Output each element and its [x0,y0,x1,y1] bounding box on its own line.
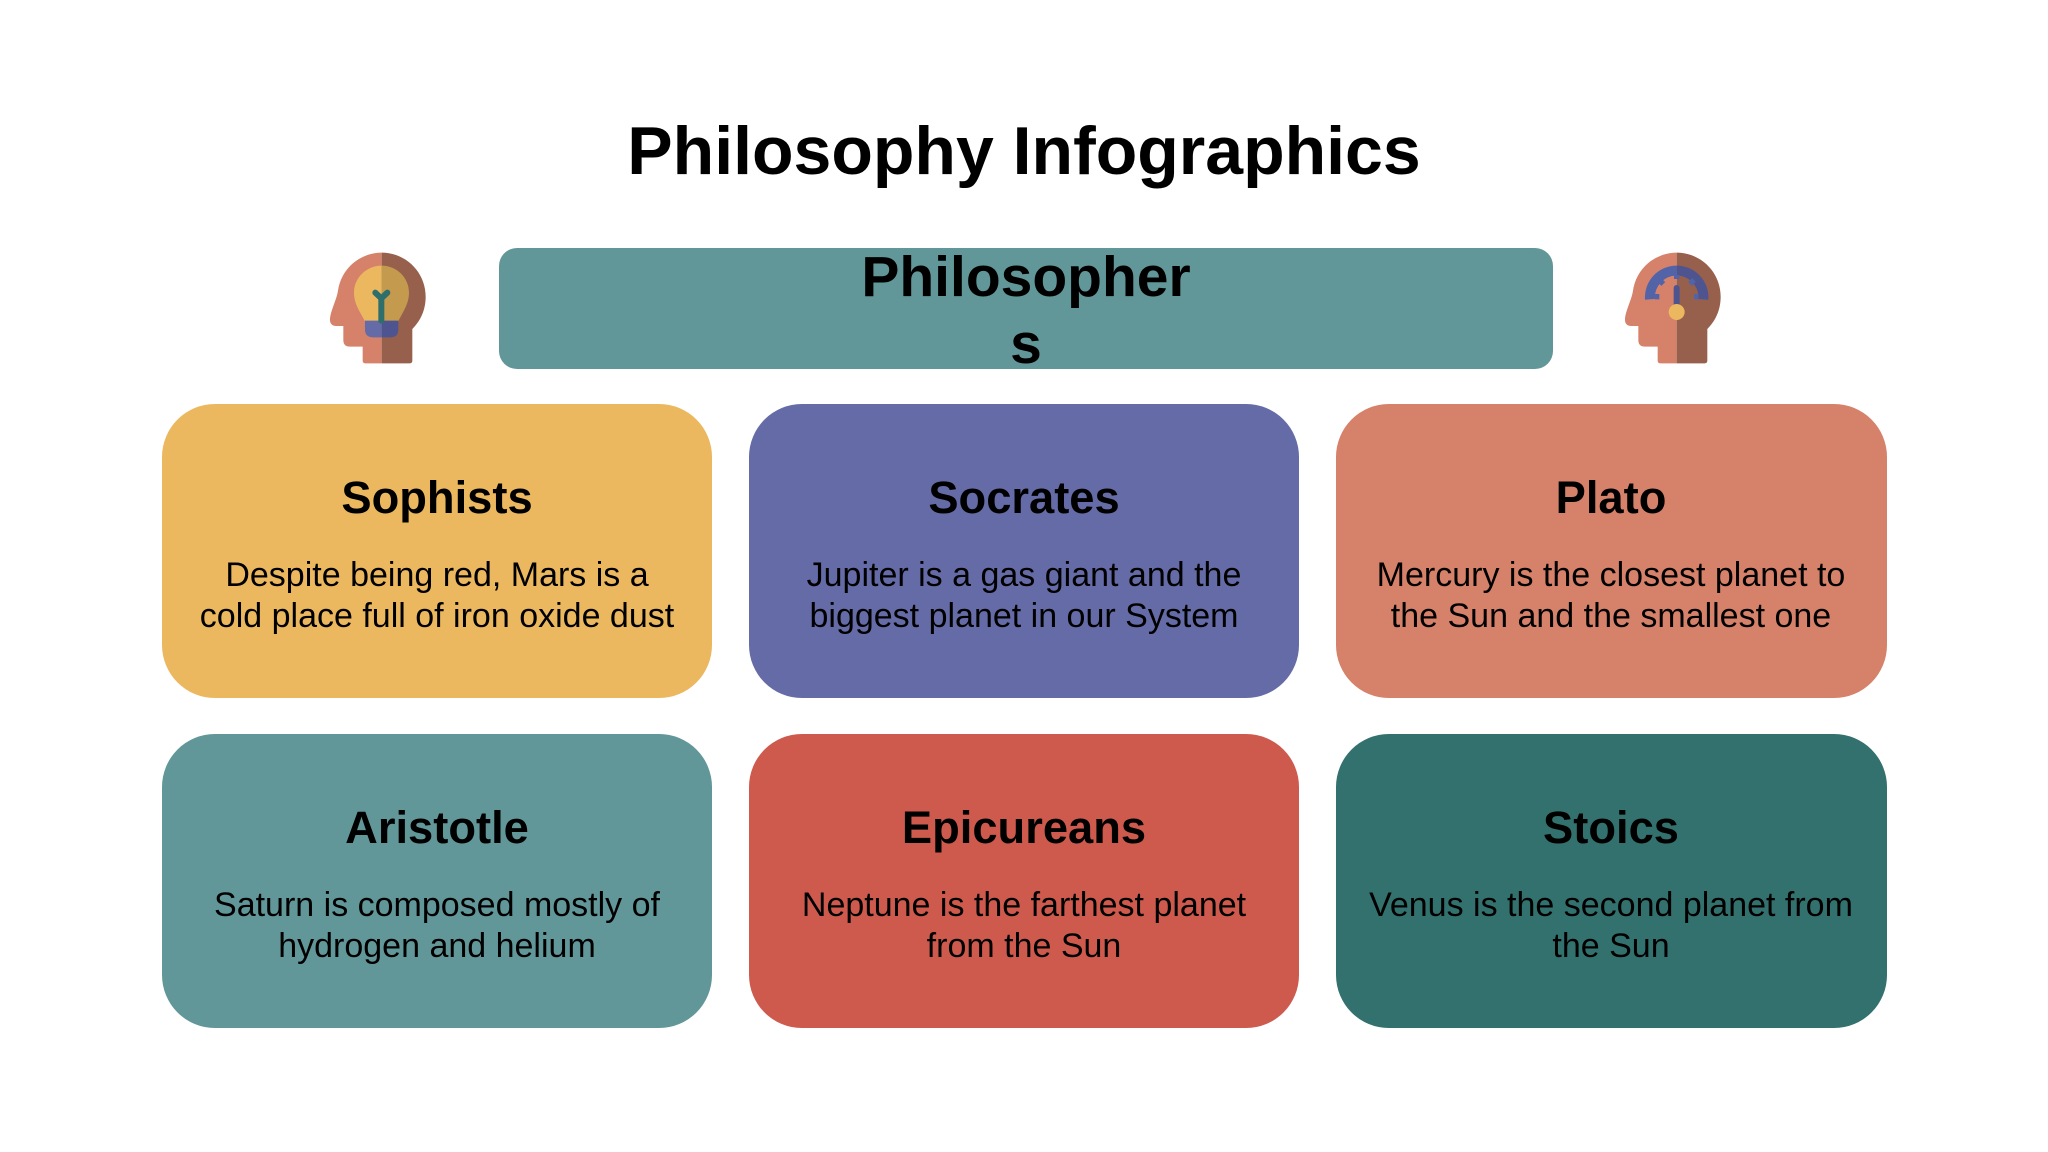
card: Stoics: Stoics [1543,802,1679,853]
card: Epicureans: Neptune is the farthest planet [802,886,1247,924]
banner: Philosophers [499,245,1553,376]
card: Stoics [1336,734,1887,1028]
card: Epicureans: Epicureans [902,802,1146,853]
card: Stoics: the Sun [1552,927,1670,965]
card: Plato: Mercury is the closest planet to [1377,556,1845,594]
card: Aristotle: Saturn is composed mostly of [214,886,661,924]
title: Philosophy Infographics [627,113,1421,189]
banner: Philosophers: Philosopher [861,245,1191,309]
card: Socrates: Socrates [928,472,1120,523]
card: Epicureans: from the Sun [927,927,1121,965]
card: Epicureans [749,734,1299,1028]
card: Sophists: cold place full of iron oxide dust [200,597,675,635]
icon: head with light bulb [330,253,426,363]
card: Socrates: Jupiter is a gas giant and the [807,556,1241,594]
card: Plato: the Sun and the smallest one [1391,597,1831,635]
card: Plato [1336,404,1887,698]
card: Aristotle: Aristotle [345,802,529,853]
card: Socrates [749,404,1299,698]
banner: Philosophers: s [1010,312,1042,376]
card: Aristotle [162,734,712,1028]
card: Stoics: Venus is the second planet from [1369,886,1853,924]
card: Sophists: Despite being red, Mars is a [225,556,649,594]
card: Sophists [162,404,712,698]
card: Aristotle: hydrogen and helium [278,927,596,965]
icon: head with gauge [1625,253,1721,363]
card: Plato: Plato [1556,472,1666,523]
card: Sophists: Sophists [341,472,533,523]
card: Socrates: biggest planet in our System [809,597,1239,635]
